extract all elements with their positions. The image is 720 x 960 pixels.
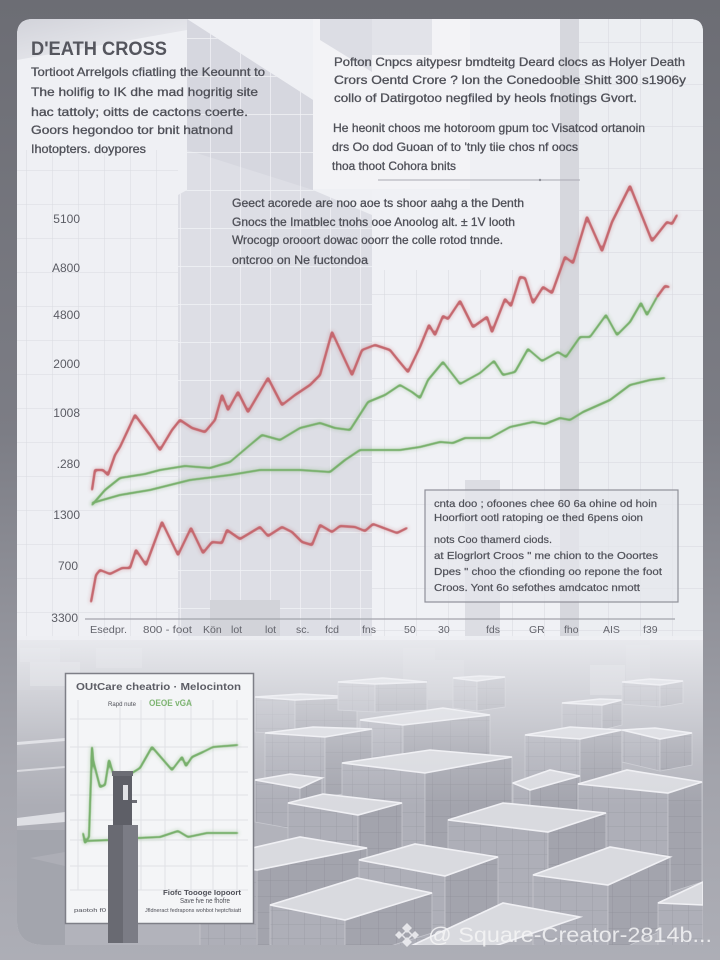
x axis labels: fds — [486, 624, 500, 636]
text block: top right paragraph: Pofton Cnpcs aitypesr bmdteitg Deard clocs as Holyer Death — [334, 55, 685, 69]
inset footer text: paotoh f0 — [74, 908, 106, 914]
icon: pillar in front of inset chart — [108, 771, 138, 943]
inset footer text: Jfldneract fedrapons wohbot heptcfisiatt — [145, 908, 241, 914]
y axis labels: 1300 — [53, 508, 80, 522]
inset green line: upper — [83, 745, 238, 843]
inset footer text: Save fve ne fhofre — [180, 898, 230, 905]
x axis labels: sc. — [296, 624, 309, 636]
text block: mid chart note: Gnocs the Imatblec tnohs ooe Anoolog alt. ± 1V looth — [232, 215, 515, 229]
x axis labels: GR — [529, 624, 545, 636]
callout box: Croos. Yont 6o sefothes amdcatoc nmott — [434, 582, 640, 594]
panel: inset chart — [66, 674, 254, 924]
callout box: Dpes " choo the cfionding oo repone the foot — [434, 566, 662, 578]
text block: top right paragraph: collo of Datirgotoo negfiled by heols fnotings Gvort. — [334, 91, 637, 105]
x axis labels: fcd — [325, 624, 339, 636]
callout box — [425, 490, 678, 602]
divider line — [378, 179, 580, 181]
red line: upper price — [92, 186, 677, 490]
text block: second right paragraph: drs Oo dod Guoan of to 'tnly tiie chos nf oocs — [332, 140, 578, 154]
y axis labels: 2000 — [53, 357, 80, 371]
y axis labels — [51, 212, 80, 625]
x axis labels: Kön — [203, 624, 222, 636]
inset title: OUtCare cheatrio · Melocinton — [76, 681, 241, 693]
text block: intro — [31, 65, 265, 156]
text block: second right paragraph: He heonit choos me hotoroom gpum toc Visatcod ortanoin — [333, 121, 645, 135]
text block: mid chart note: Geect acorede are noo aoe ts shoor aahg a the Denth — [232, 196, 524, 210]
watermark — [395, 923, 712, 947]
red line: lower price — [91, 522, 407, 602]
y axis labels: 700 — [58, 559, 78, 573]
title: D'EATH CROSS — [31, 39, 167, 60]
green line: upper moving average — [92, 297, 657, 505]
inset footer text — [74, 888, 242, 914]
text block: intro: Tortioot Arrelgols cfiatling the Keounnt to — [31, 65, 265, 79]
y axis labels: 1008 — [53, 406, 80, 420]
line chart: death cross price trends — [51, 186, 677, 636]
inset footer text: Fiofc Toooge Iopoort — [163, 888, 242, 897]
x axis line — [85, 618, 675, 620]
x axis labels — [90, 624, 658, 636]
x axis labels: f39 — [643, 624, 658, 636]
text block: intro: hac tattoly; oitts de cactons coerte. — [31, 105, 248, 119]
y axis labels: 4800 — [53, 308, 80, 322]
callout box: Hoorfiort ootl ratoping oe thed 6pens oion — [434, 512, 643, 524]
text block: intro: The holifig to IK dhe mad hogritig site — [31, 85, 258, 99]
y axis labels: .280 — [57, 457, 80, 471]
city blocks illustration — [17, 636, 703, 960]
x axis labels: fho — [564, 624, 579, 636]
text block: top right paragraph — [334, 55, 686, 105]
x axis labels: Esedpr. — [90, 624, 127, 636]
x axis labels: 800 - foot — [143, 624, 192, 636]
text block: second right paragraph — [332, 121, 645, 173]
inset legend — [108, 698, 192, 708]
inset grid — [70, 700, 248, 890]
text block: mid chart note — [232, 196, 524, 267]
callout box: at Elogrlort Croos " me chion to the Ooortes — [434, 550, 658, 562]
inset legend: Rapd nute — [108, 702, 137, 708]
y axis labels: A800 — [52, 261, 80, 275]
x axis labels: AIS — [603, 624, 620, 636]
text block: mid chart note: Wrocogp orooort dowac ooorr the colle rotod tnnde. — [232, 233, 503, 247]
x axis labels: 50 — [404, 624, 416, 636]
y axis labels: 5100 — [53, 212, 80, 226]
x axis labels: lot — [265, 624, 276, 636]
text block: intro: Goors hegondoo tor bnit hatnond — [31, 123, 233, 137]
green line: lower moving average — [92, 378, 665, 503]
y axis labels: 3300 — [51, 611, 78, 625]
watermark text: @ Square-Creator-2814b... — [428, 924, 712, 947]
text block: second right paragraph: thoa thoot Cohora bnits — [332, 159, 456, 173]
line tip: upper moving average end — [657, 286, 669, 297]
text block: intro: Ihotopters. doypores — [31, 142, 146, 156]
x axis labels: 30 — [438, 624, 450, 636]
x axis labels: lot — [231, 624, 242, 636]
inset legend: OEOE vGA — [149, 698, 192, 708]
text block: mid chart note: ontcroo on Ne fuctondoa — [232, 253, 368, 267]
text block: top right paragraph: Crors Oentd Crore ? lon the Conedooble Shitt 300 s1906y — [334, 73, 686, 87]
x axis labels: fns — [362, 624, 376, 636]
inset green line: lower — [85, 831, 238, 841]
icon: diamond logo — [395, 923, 419, 947]
callout box: nots Coo thamerd ciods. — [434, 534, 552, 546]
callout box: cnta doo ; ofoones chee 60 6a ohine od hoin — [434, 498, 657, 510]
